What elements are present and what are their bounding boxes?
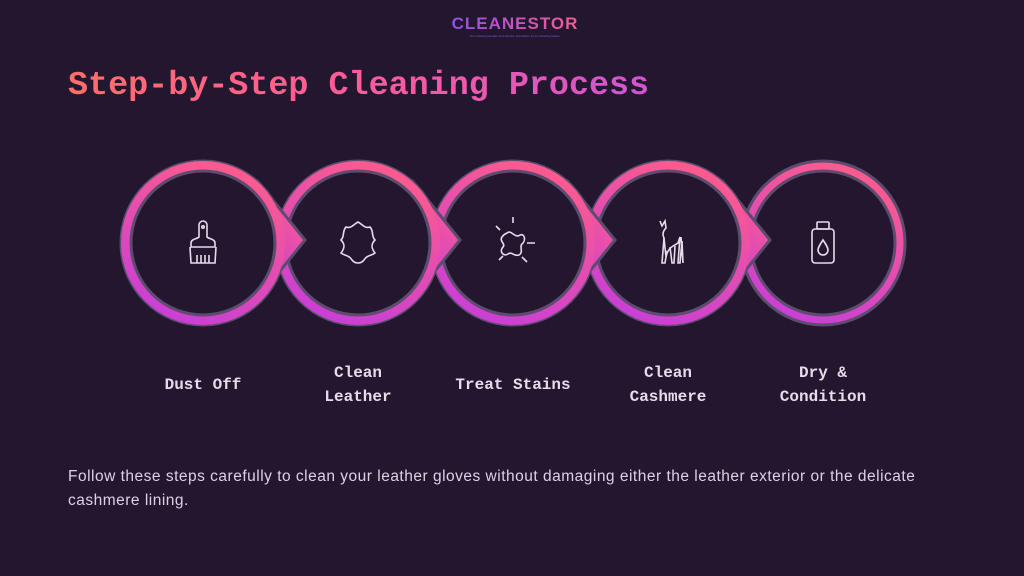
label: dry and condition	[780, 364, 866, 406]
step 3 circle	[431, 161, 615, 325]
title: Step-by-Step Cleaning Process	[68, 67, 649, 105]
description text	[68, 468, 915, 509]
label: dry and condition: Dry &	[799, 364, 847, 382]
label: dust off: Dust Off	[165, 376, 241, 394]
label: dry and condition: Condition	[780, 388, 866, 406]
label: treat stains: Treat Stains	[455, 376, 571, 394]
label: clean leather	[324, 364, 392, 406]
logo: Pro Cleaning Guides And Service Journalism From Cleaning Nation	[470, 34, 560, 38]
logo: CLEANESTOR	[452, 14, 578, 33]
step 2 circle	[276, 161, 460, 325]
description text: Follow these steps carefully to clean your leather gloves without damaging either the leather exterior or the delicate	[68, 468, 915, 485]
step 1 circle	[121, 161, 305, 325]
label: clean leather: Leather	[324, 388, 392, 406]
description text: cashmere lining.	[68, 492, 189, 509]
step 4 circle	[586, 161, 770, 325]
label: clean cashmere	[630, 364, 706, 406]
step 5 circle	[741, 161, 905, 325]
label: clean cashmere: Cashmere	[630, 388, 706, 406]
label: clean leather: Clean	[334, 364, 382, 382]
label: clean cashmere: Clean	[644, 364, 692, 382]
